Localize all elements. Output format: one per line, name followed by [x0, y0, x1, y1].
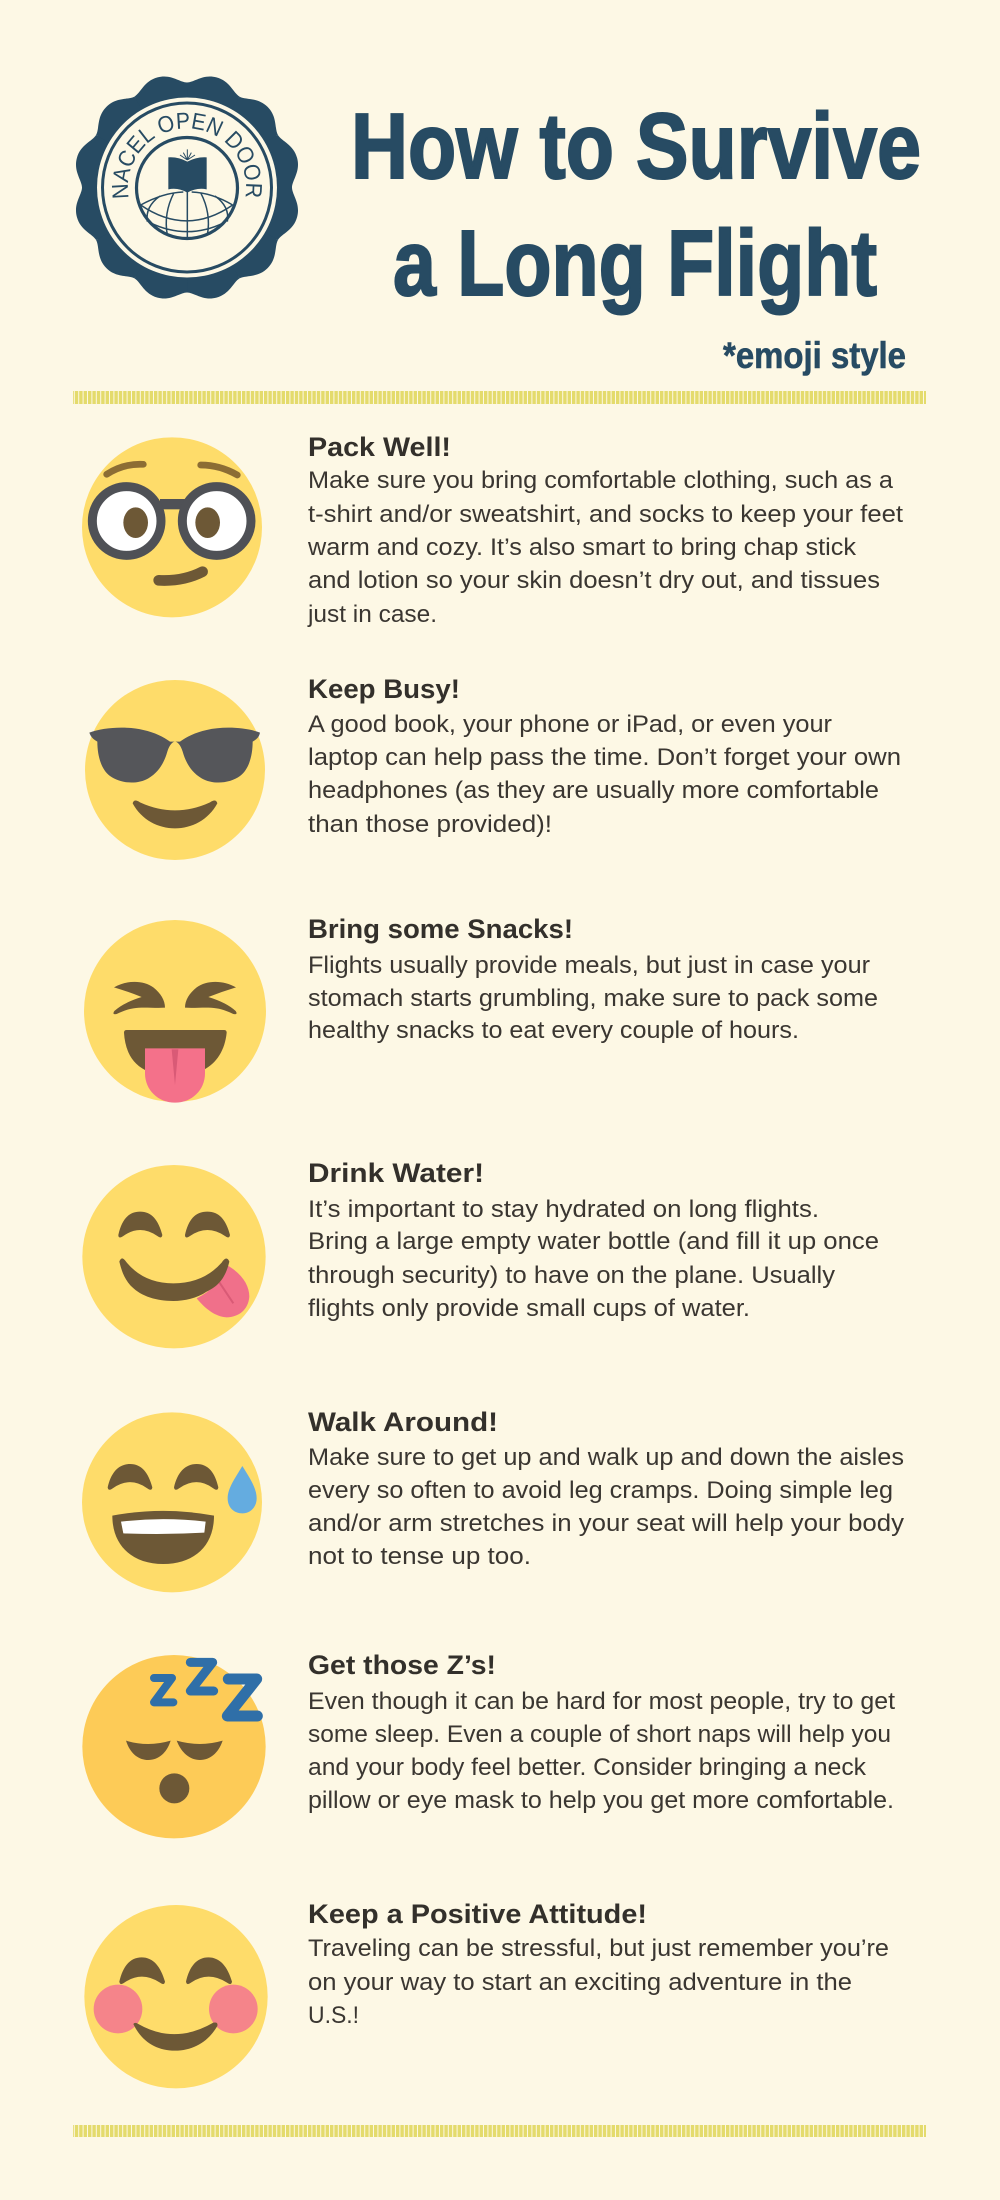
body text: t-shirt and/or sweatshirt, and socks to keep your feet [308, 501, 903, 528]
body text: healthy snacks to eat every couple of hours. [308, 1017, 799, 1044]
heading: Pack Well! [308, 432, 451, 462]
body text: Make sure to get up and walk up and down the aisles [308, 1444, 904, 1471]
logo: Nacel Open Door badge [76, 76, 298, 298]
icon: sleeping emoji [82, 1655, 266, 1838]
heading: Keep a Positive Attitude! [308, 1899, 647, 1929]
icon: sunglasses emoji [85, 680, 265, 860]
body text: Traveling can be stressful, but just remember you’re [308, 1935, 889, 1962]
icon: open book and globe [141, 149, 233, 239]
body text: and lotion so your skin doesn’t dry out, and tissues [308, 567, 880, 594]
panel: Keep Busy [85, 674, 901, 860]
icon: sweat drop grin emoji [82, 1412, 262, 1592]
heading: Bring some Snacks! [308, 914, 573, 944]
body text: It’s important to stay hydrated on long flights. [308, 1196, 819, 1223]
body text: and your body feel better. Consider bringing a neck [308, 1754, 867, 1781]
body text: not to tense up too. [308, 1543, 531, 1570]
body text [308, 1688, 895, 1814]
body text [307, 467, 903, 628]
body text: on your way to start an exciting adventure in the [308, 1969, 852, 1996]
body text: A good book, your phone or iPad, or even your [308, 711, 832, 738]
body text [308, 952, 878, 1044]
body text [308, 1444, 904, 1570]
panel: Drink Water [82, 1158, 879, 1348]
badge text: NACEL OPEN DOOR [112, 112, 262, 198]
panel: Keep a Positive Attitude [84, 1899, 889, 2088]
body text: than those provided)! [308, 811, 552, 838]
panel: Walk Around [82, 1407, 904, 1592]
body text [308, 1196, 879, 1322]
heading: Drink Water! [308, 1158, 484, 1188]
panel: Get those Z's [82, 1650, 895, 1838]
title [351, 94, 921, 315]
heading: Get those Z’s! [308, 1650, 496, 1680]
body text: through security) to have on the plane. Usually [308, 1262, 835, 1289]
icon: nerd glasses emoji [82, 437, 262, 617]
body text: Make sure you bring comfortable clothing, such as a [308, 467, 894, 494]
body text: some sleep. Even a couple of short naps will help you [308, 1721, 891, 1748]
body text: and/or arm stretches in your seat will help your body [308, 1510, 904, 1537]
body text: headphones (as they are usually more comfortable [308, 777, 879, 804]
body text: flights only provide small cups of water. [308, 1295, 750, 1322]
divider: top stripe [73, 391, 926, 404]
subtitle: *emoji style [723, 335, 906, 376]
title: a Long Flight [393, 211, 877, 315]
body text: Bring a large empty water bottle (and fill it up once [308, 1228, 879, 1255]
heading: Walk Around! [308, 1407, 498, 1437]
panel: Pack Well [82, 432, 903, 628]
body text: pillow or eye mask to help you get more comfortable. [308, 1787, 894, 1814]
heading: Keep Busy! [308, 674, 460, 704]
body text [308, 711, 901, 838]
body text [308, 1935, 889, 2029]
icon: blushing smile emoji [84, 1905, 268, 2088]
body text: just in case. [307, 601, 437, 628]
icon: licking lips emoji [82, 1165, 266, 1348]
body text: warm and cozy. It’s also smart to bring chap stick [307, 534, 857, 561]
body text: U.S.! [308, 2002, 359, 2029]
divider: bottom stripe [73, 2125, 926, 2137]
body text: every so often to avoid leg cramps. Doing simple leg [308, 1477, 893, 1504]
body text: Flights usually provide meals, but just in case your [308, 952, 870, 979]
panel: Bring some Snacks [84, 914, 878, 1103]
body text: Even though it can be hard for most people, try to get [308, 1688, 895, 1715]
body text: stomach starts grumbling, make sure to pack some [308, 985, 878, 1012]
body text: laptop can help pass the time. Don’t forget your own [308, 744, 901, 771]
icon: tongue out squinting emoji [84, 920, 266, 1103]
